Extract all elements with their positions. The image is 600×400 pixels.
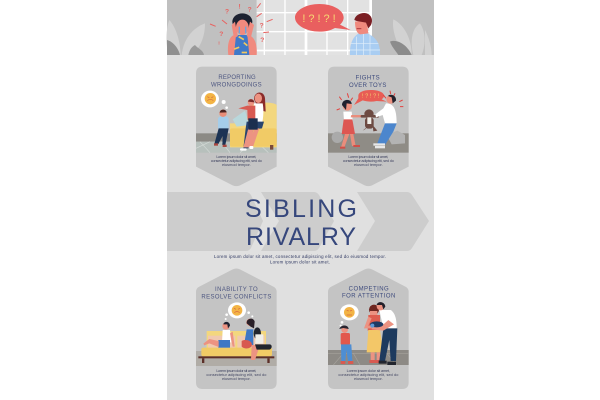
ball and box — [332, 131, 405, 144]
figure: father — [372, 302, 397, 365]
body text: Lorem ipsum dolor sit amet, — [348, 155, 388, 159]
body text: eiusmod tempor. — [354, 163, 383, 167]
subtitle: Lorem ipsum dolor sit amet, consectetur adipiscing elit, sed do eiusmod tempor. — [214, 254, 386, 259]
floor — [328, 350, 409, 365]
icon: right plant — [390, 19, 432, 55]
stress marks around woman: ? — [225, 8, 229, 15]
heading: INABILITY TO — [215, 287, 258, 293]
stress marks around woman: ? — [219, 31, 223, 38]
heading line two: RESOLVE CONFLICTS — [201, 294, 271, 300]
heading line two: FOR ATTENTION — [342, 294, 395, 300]
heading: FIGHTS — [356, 76, 380, 82]
figure: girl — [339, 325, 353, 364]
thought bubble — [340, 304, 359, 327]
stress marks around woman: ? — [260, 22, 264, 29]
body text — [211, 155, 262, 167]
figure: boy on couch — [203, 322, 235, 348]
stress marks around woman — [210, 3, 273, 46]
thought bubble — [225, 302, 253, 320]
title line two: RIVALRY — [246, 223, 356, 251]
figure: baby — [370, 321, 383, 328]
body text: consectetur adipiscing elit, sed do — [211, 159, 262, 163]
body text: eiusmod tempor. — [222, 163, 251, 167]
body text: consectetur adipiscing elit, sed do — [338, 373, 398, 377]
panel: inability to resolve conflicts — [196, 268, 277, 389]
couch — [230, 103, 277, 150]
couch — [198, 331, 274, 363]
panel: competing for attention — [328, 268, 409, 389]
figure: boy — [373, 95, 397, 148]
body text: eiusmod tempor. — [222, 377, 251, 381]
title: SIBLING — [245, 195, 357, 223]
body text: Lorem ipsum dolor sit amet, — [216, 155, 256, 159]
stress marks around woman: ! — [218, 41, 220, 46]
figure: girl — [340, 100, 363, 149]
speech bubble: !?!?! — [302, 13, 336, 25]
body text: Lorem ipsum dolor sit amet, — [347, 369, 390, 373]
figure: boy — [350, 13, 380, 55]
heading line two: WRONGDOINGS — [211, 82, 262, 88]
icon: left plant — [166, 20, 205, 55]
figure: standing boy — [214, 110, 229, 147]
pillow — [233, 111, 249, 127]
panel: top banner scene — [166, 0, 434, 55]
figure: mother and child — [238, 93, 266, 151]
speech bubble: !?!?! — [362, 94, 379, 100]
heading: COMPETING — [349, 287, 389, 293]
heading line two: OVER TOYS — [349, 83, 386, 89]
subtitle — [214, 254, 386, 264]
stress marks around woman: ! — [239, 3, 241, 10]
body text: consectetur adipiscing elit, sed do — [206, 373, 266, 377]
stress marks around woman: ? — [260, 37, 264, 44]
arrow two — [261, 192, 334, 251]
panel: title chevrons — [167, 192, 429, 264]
arrow one — [167, 192, 263, 251]
figure: mother — [364, 305, 383, 363]
subtitle: Lorem ipsum dolor sit amet. — [270, 260, 330, 264]
heading: REPORTING — [218, 75, 256, 81]
floor — [196, 133, 277, 153]
arrow three — [357, 192, 429, 251]
figure: girl with cat — [242, 319, 272, 360]
stress marks around woman: ? — [248, 6, 252, 13]
body text: eiusmod tempor. — [354, 377, 383, 381]
icon: teddy bear — [361, 109, 379, 131]
body text — [206, 369, 266, 381]
floor — [196, 351, 277, 366]
body text: Lorem ipsum dolor sit amet, — [216, 369, 256, 373]
floor — [328, 133, 409, 153]
body text — [343, 155, 394, 167]
stress marks — [337, 91, 403, 110]
panel: fights over toys — [328, 67, 409, 186]
body text — [338, 369, 398, 381]
figure: upset woman — [228, 13, 257, 55]
speech bubble — [295, 4, 351, 32]
panel: reporting wrongdoings — [196, 67, 277, 186]
body text: consectetur adipiscing elit, sed do — [343, 159, 394, 163]
thought bubble — [201, 91, 228, 109]
